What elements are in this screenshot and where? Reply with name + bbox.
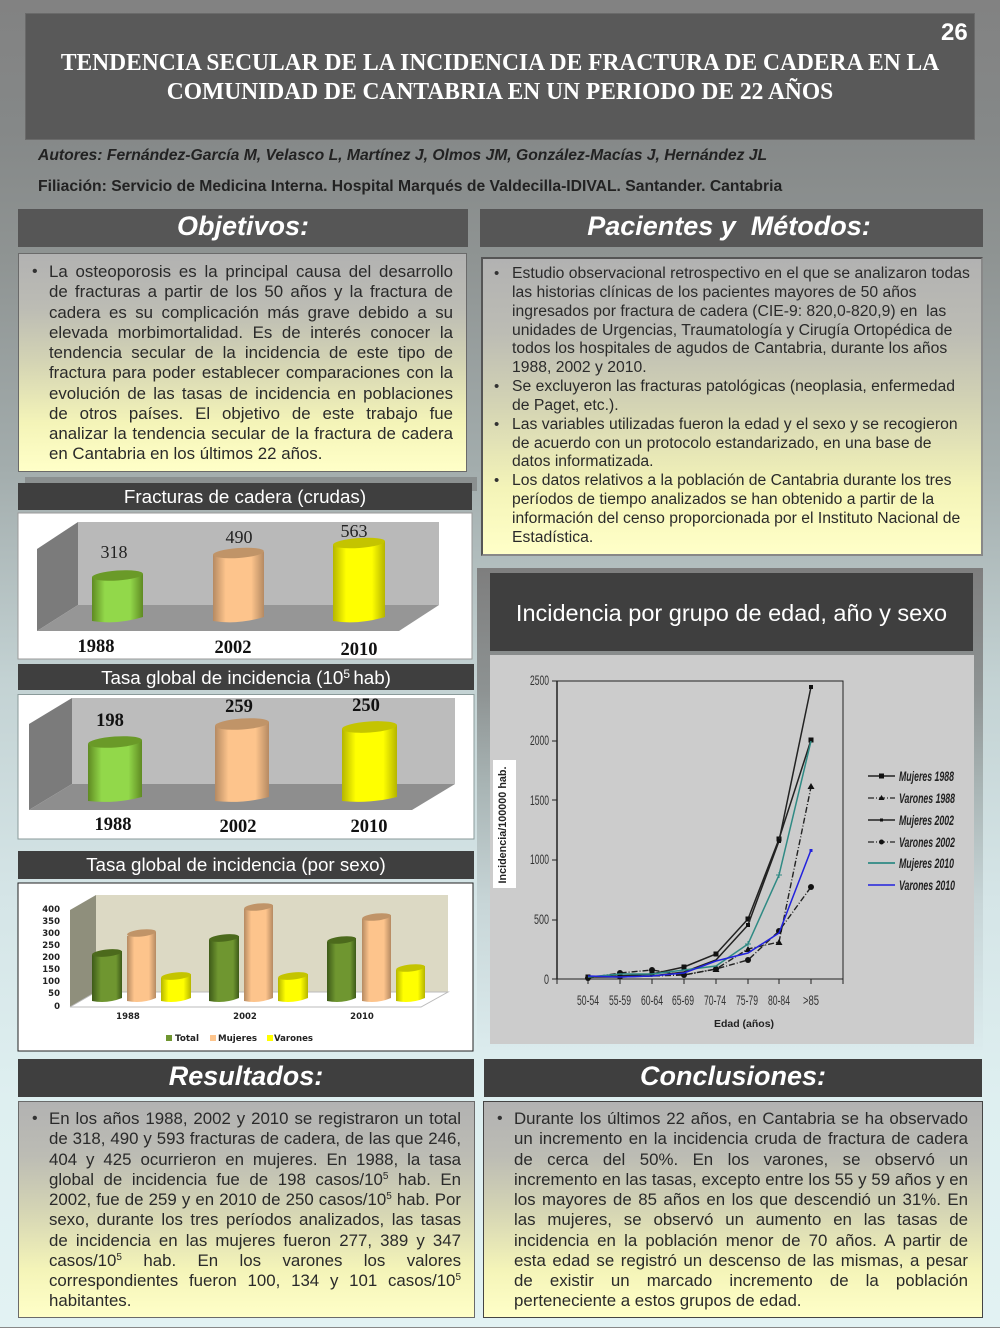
text: conclusiones: los mayores de 85 años en los que descendió un 31%. En bbox=[514, 1190, 968, 1209]
chart frame bbox=[18, 694, 474, 839]
text: pacientes y métodos: Estadística. bbox=[512, 529, 593, 546]
x axis values: 60-64 bbox=[641, 992, 663, 1008]
text: objetivos: elevada morbimortalidad. Es de interés conocer la bbox=[49, 323, 453, 342]
bullets bbox=[494, 265, 499, 489]
cylinder 2010: 563 bbox=[340, 521, 368, 541]
text: objetivos: cadera es su complicación más grave debido a su bbox=[49, 302, 453, 322]
year labels bbox=[78, 637, 378, 660]
bullets: • bbox=[494, 472, 499, 489]
bullet: • bbox=[497, 1110, 503, 1127]
3d walls bbox=[70, 895, 448, 1007]
chart: tasa global de incidencia bbox=[18, 694, 474, 840]
text: pacientes y métodos: ingresados por fractura de cadera (CIE-9: 820,0-820,9) en las bbox=[512, 303, 946, 320]
text: pacientes y métodos: de Paget, etc.). bbox=[512, 397, 619, 414]
series: Mujeres 2002 bbox=[588, 685, 813, 977]
text: resultados: de incidencia en las mujeres fueron 277, 389 y 347 bbox=[49, 1230, 461, 1250]
y axis values: 500 bbox=[534, 911, 549, 927]
chart frame bbox=[18, 883, 473, 1051]
text: conclusiones: Durante los últimos 22 años, en Cantabria se ha observado bbox=[514, 1109, 968, 1128]
axes bbox=[552, 681, 843, 984]
subheading: fracturas crudas: Fracturas de cadera (crudas) bbox=[124, 486, 366, 507]
y axis label: Incidencia/100000 hab. bbox=[497, 766, 509, 884]
3d walls bbox=[37, 522, 439, 631]
heading: incidencia: Incidencia por grupo de edad, año y sexo bbox=[516, 600, 947, 626]
cylinder 1988 bbox=[88, 711, 142, 802]
series: Varones 2002 bbox=[585, 884, 814, 981]
bullet: • bbox=[32, 263, 38, 280]
year labels: 2002 bbox=[214, 638, 252, 658]
group 2010 bbox=[327, 912, 425, 1002]
subheading: tasa por sexo: Tasa global de incidencia (por sexo) bbox=[86, 854, 386, 875]
text: resultados: global de incidencia fue de 198 casos/105 hab. En bbox=[49, 1170, 461, 1189]
text: pacientes y métodos: de acuerdo con un protocolo estandarizado, en una base de bbox=[512, 435, 931, 452]
text: conclusiones: esta edad se registró un descenso de las mismas, a pesar bbox=[514, 1251, 968, 1270]
text: pacientes y métodos: Los datos relativos a la población de Cantabria durante los tres bbox=[512, 472, 952, 489]
y axis values: 200 bbox=[42, 953, 60, 963]
series: Mujeres 1988 bbox=[586, 738, 814, 980]
subheading: fracturas crudas bbox=[18, 483, 472, 510]
y axis values bbox=[530, 672, 549, 987]
year labels: 2010 bbox=[350, 1012, 374, 1022]
affiliation: Filiación: Servicio de Medicina Interna. Hospital Marqués de Valdecilla-IDIVAL. Santander. Cantabria bbox=[38, 178, 782, 195]
year labels: 2002 bbox=[233, 1012, 257, 1022]
cylinder 2002: 259 bbox=[225, 697, 253, 717]
plot background bbox=[490, 655, 974, 1044]
cylinder 1988: 198 bbox=[96, 711, 124, 731]
year labels: 1988 bbox=[78, 637, 114, 657]
text: conclusiones: incidencia en la población menor de 70 años. A partir de bbox=[514, 1230, 968, 1250]
heading: Pacientes y Métodos: Pacientes y Métodos: bbox=[587, 211, 871, 241]
heading: Resultados bbox=[18, 1059, 474, 1097]
y axis values: 150 bbox=[42, 965, 60, 975]
year labels bbox=[116, 1012, 374, 1022]
decorative panel shadow behind charts bbox=[25, 477, 477, 491]
text: conclusiones: de cerca del 50%. En los varones, se observó un bbox=[514, 1150, 968, 1168]
title bbox=[61, 49, 940, 104]
panel: pacientes y métodos bbox=[481, 257, 983, 556]
y axis label bbox=[493, 760, 516, 888]
group 2002 bbox=[209, 902, 308, 1002]
cylinder 2002 bbox=[215, 697, 269, 802]
text: resultados: 2002, fue de 259 y en 2010 de 250 casos/105 hab. Por bbox=[49, 1190, 461, 1209]
text: pacientes y métodos: 1988, 2002 y 2010. bbox=[512, 359, 647, 376]
text: objetivos: tendencia secular de la incidencia de este tipo de bbox=[49, 343, 453, 362]
text: conclusiones: las mujeres, se observó un aumento en las tasas de bbox=[514, 1210, 968, 1229]
title: COMUNIDAD DE CANTABRIA EN UN PERIODO DE 22 AÑOS bbox=[167, 78, 833, 104]
y axis values: 350 bbox=[42, 917, 60, 927]
y axis values: 250 bbox=[42, 941, 60, 951]
y axis values: 100 bbox=[42, 977, 60, 987]
panel: incidence chart background bbox=[477, 568, 983, 1050]
text: pacientes y métodos: unidades de Urgencias, Traumatología y Cirugía Ortopédica de bbox=[512, 322, 952, 339]
chart: fracturas de cadera crudas bbox=[18, 512, 472, 660]
series: Varones 1988 bbox=[588, 783, 814, 977]
year labels: 2010 bbox=[350, 817, 388, 837]
x axis values: 50-54 bbox=[577, 992, 599, 1008]
text: objetivos: de otros países. El objetivo de este trabajo fue bbox=[49, 404, 453, 423]
year labels: 2002 bbox=[220, 817, 256, 837]
heading: Objetivos: Objetivos: bbox=[177, 211, 309, 241]
y axis values: 300 bbox=[42, 929, 60, 939]
text: resultados: correspondientes fueron 100, 134 y 101 casos/105 bbox=[49, 1271, 461, 1290]
legend: Varones bbox=[274, 1034, 313, 1044]
heading: Resultados: Resultados: bbox=[169, 1061, 323, 1091]
cylinder 2010: 250 bbox=[352, 696, 380, 716]
text: pacientes y métodos: Se excluyeron las fracturas patológicas (neoplasia, enfermedad bbox=[512, 378, 955, 395]
series: Mujeres 2010 bbox=[588, 741, 811, 977]
panel: objetivos bbox=[18, 253, 467, 472]
bullets: • bbox=[494, 265, 499, 282]
bullets: • bbox=[494, 378, 499, 395]
year labels: 1988 bbox=[94, 815, 132, 835]
heading: incidencia bbox=[490, 573, 973, 651]
text: conclusiones: incremento en las tasas, excepto entre los 55 y 59 años y en bbox=[514, 1170, 968, 1189]
text: objetivos: en Cantabria en los últimos 22 años. bbox=[49, 444, 322, 463]
text: pacientes y métodos: períodos de tiempo analizados se han obtenido a partir de la bbox=[512, 491, 934, 508]
legend: Mujeres bbox=[218, 1034, 257, 1044]
text: pacientes y métodos: datos informatizada. bbox=[512, 453, 654, 470]
text: pacientes y métodos: las historias clínicas de los pacientes mayores de 50 años bbox=[512, 284, 917, 301]
authors: Autores: Fernández-García M, Velasco L, Martínez J, Olmos JM, González-Macías J, Hernández JL bbox=[38, 147, 767, 164]
cylinder 2010 bbox=[342, 696, 397, 802]
text: conclusiones: un incremento en la incidencia cruda de fractura de cadera bbox=[514, 1129, 968, 1148]
x axis values: 70-74 bbox=[704, 992, 726, 1008]
line chart: incidencia por edad bbox=[490, 655, 974, 1044]
cylinder 2010 bbox=[333, 521, 385, 622]
text: resultados: casos/105 hab. En los varones los valores bbox=[49, 1251, 461, 1270]
y axis values: 1500 bbox=[530, 792, 549, 808]
text: pacientes y métodos: Estudio observacional retrospectivo en el que se analizaron todas bbox=[512, 265, 970, 282]
y axis values bbox=[42, 905, 60, 1012]
year labels bbox=[94, 815, 388, 837]
text: conclusiones: perteneciente a estos grupos de edad. bbox=[514, 1291, 802, 1310]
bullet: • bbox=[32, 1110, 38, 1127]
text: resultados: de 318, 490 y 593 fracturas de cadera, de las que 246, bbox=[49, 1129, 461, 1148]
text: objetivos: de fracturas a partir de los 50 años y la fractura de bbox=[49, 282, 453, 301]
y axis values: 1000 bbox=[530, 851, 549, 867]
subheading: tasa por sexo bbox=[18, 851, 474, 879]
chart: tasa global por sexo bbox=[18, 882, 474, 1052]
legend bbox=[166, 1034, 313, 1044]
y axis values: 0 bbox=[54, 1002, 60, 1012]
text: resultados bbox=[49, 1109, 461, 1310]
text: resultados: habitantes. bbox=[49, 1291, 131, 1310]
text: conclusiones: de existir un marcado incremento de la población bbox=[514, 1271, 968, 1290]
cylinder 2002: 490 bbox=[226, 527, 252, 547]
x axis values: >85 bbox=[803, 992, 819, 1008]
subheading: tasa global bbox=[18, 664, 474, 690]
panel: conclusiones bbox=[483, 1101, 983, 1318]
x axis values: 65-69 bbox=[672, 992, 694, 1008]
heading: Conclusiones bbox=[484, 1059, 982, 1097]
text: objetivos: fractura para poder establecer comparaciones con la bbox=[49, 363, 453, 382]
heading: Conclusiones: Conclusiones: bbox=[640, 1061, 826, 1091]
text: pacientes y métodos: todos los hospitales de agudos de Cantabria, durante los años bbox=[512, 340, 947, 357]
y axis values: 0 bbox=[544, 971, 549, 987]
bullets: • bbox=[494, 416, 499, 433]
year labels: 2010 bbox=[340, 640, 378, 660]
text: resultados: 404 y 425 ocurrieron en mujeres. En 1988, la tasa bbox=[49, 1150, 461, 1168]
y axis values: 2000 bbox=[530, 732, 549, 748]
y axis values: 2500 bbox=[530, 672, 549, 688]
text: pacientes y métodos: información del censo proporcionada por el Instituto Nacional de bbox=[512, 510, 960, 527]
legend: Total bbox=[175, 1034, 199, 1044]
chart frame bbox=[18, 513, 472, 659]
text: objetivos: evolución de las tasas de incidencia en poblaciones bbox=[49, 384, 453, 402]
panel: resultados bbox=[18, 1101, 475, 1318]
heading: Objetivos bbox=[18, 209, 468, 247]
x axis values: 75-79 bbox=[736, 992, 758, 1008]
heading: Pacientes y Métodos bbox=[480, 209, 983, 247]
text: resultados: sexo, durante los tres períodos analizados, las tasas bbox=[49, 1210, 461, 1229]
text: objetivos: La osteoporosis es la principal causa del desarrollo bbox=[49, 262, 453, 281]
x axis title: Edad (años) bbox=[714, 1018, 774, 1030]
year labels: 1988 bbox=[116, 1012, 140, 1022]
y axis values: 50 bbox=[48, 989, 60, 999]
text: pacientes y métodos bbox=[512, 265, 970, 546]
cylinder 2002 bbox=[213, 527, 264, 622]
text: objetivos bbox=[49, 262, 453, 463]
text: resultados: En los años 1988, 2002 y 2010 se registraron un total bbox=[49, 1109, 461, 1128]
text: pacientes y métodos: Las variables utilizadas fueron la edad y el sexo y se recogieron bbox=[512, 416, 958, 433]
header banner bbox=[25, 13, 975, 140]
group 1988 bbox=[92, 928, 191, 1002]
title: TENDENCIA SECULAR DE LA INCIDENCIA DE FRACTURA DE CADERA EN LA bbox=[61, 49, 939, 76]
text: objetivos: analizar la tendencia secular de la fractura de cadera bbox=[49, 424, 453, 443]
cylinder 1988: 318 bbox=[100, 542, 128, 562]
x axis values: 80-84 bbox=[768, 992, 790, 1008]
cylinder 1988 bbox=[92, 542, 143, 622]
series: Varones 2010 bbox=[588, 849, 812, 977]
text: conclusiones bbox=[514, 1109, 968, 1310]
x axis values: 55-59 bbox=[609, 992, 631, 1008]
3d walls bbox=[29, 698, 455, 810]
poster number: 26 bbox=[941, 19, 968, 46]
y axis values: 400 bbox=[42, 905, 60, 915]
legend bbox=[868, 768, 955, 893]
x axis values bbox=[577, 992, 819, 1008]
subheading: tasa global: Tasa global de incidencia (105 hab) bbox=[101, 667, 391, 688]
